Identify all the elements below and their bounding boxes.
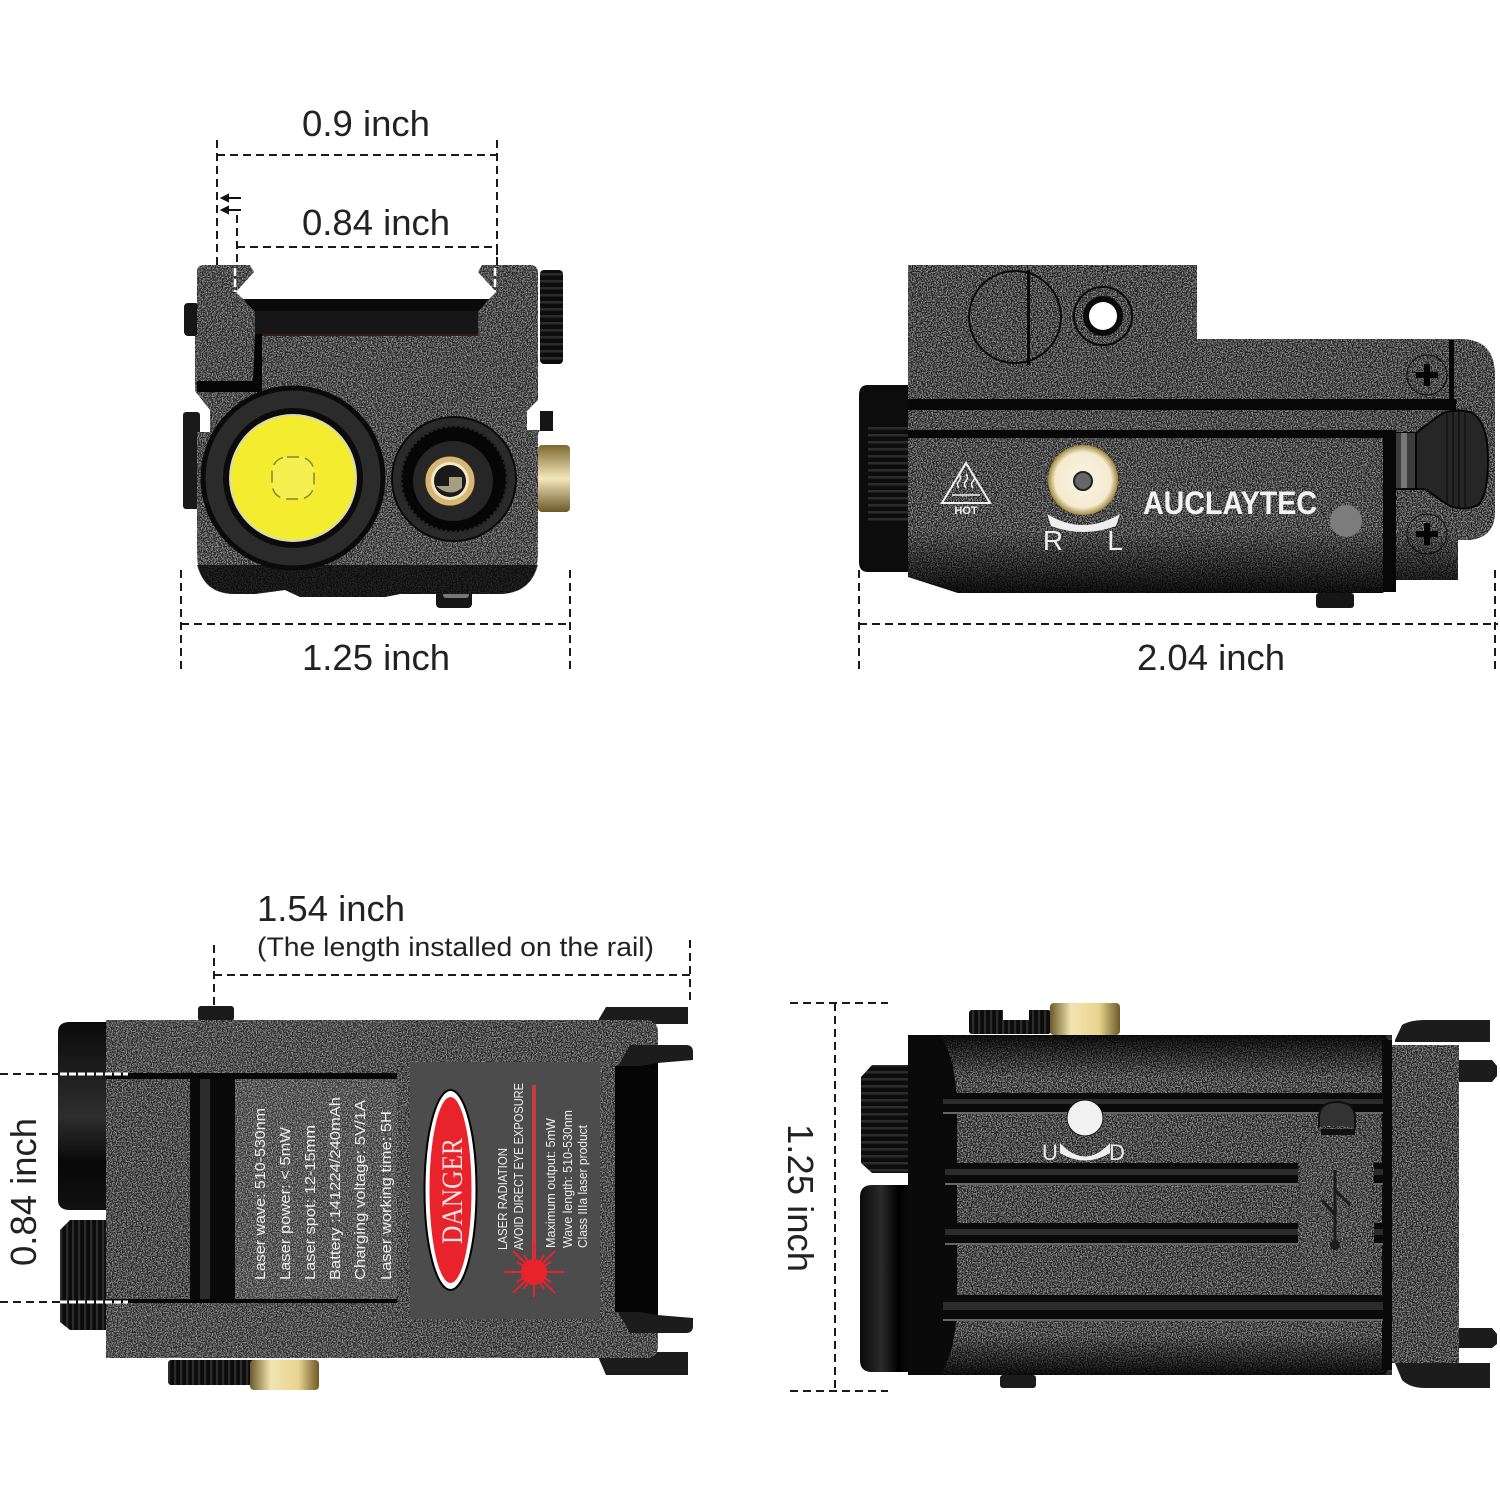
body xyxy=(195,265,540,597)
dimension: 1.54 inch: (The length installed on the rail) xyxy=(257,932,654,962)
lens and knob xyxy=(859,385,908,572)
grooves xyxy=(943,1093,1383,1321)
laser aperture xyxy=(392,417,516,541)
danger oval: DANGER xyxy=(436,1138,469,1244)
rail slot xyxy=(197,299,489,392)
dimension: 1.25 inch vertical xyxy=(780,1003,888,1391)
body xyxy=(908,265,1495,593)
body xyxy=(908,1035,1459,1375)
front band xyxy=(908,1035,957,1375)
windage screw: R xyxy=(1043,525,1063,556)
lens and knob xyxy=(58,1022,106,1330)
specification text: Laser wave: 510-530nm xyxy=(252,1108,269,1280)
side parts xyxy=(183,270,563,608)
dimension: 0.9 inch xyxy=(217,103,497,265)
laser warning text: Maximum output: 5mW xyxy=(543,1117,558,1248)
studs and brass knob xyxy=(168,1006,319,1390)
screws xyxy=(1407,355,1447,554)
tabs and prongs xyxy=(1395,1020,1497,1388)
laser beam and starburst xyxy=(504,1085,564,1297)
label plate xyxy=(410,1062,600,1319)
body xyxy=(106,1020,658,1358)
specification text: Laser spot: 12-15mm xyxy=(302,1125,319,1280)
flashlight lens xyxy=(203,388,383,568)
lever xyxy=(1396,411,1488,508)
laser warning text: Wave length: 510-530nm xyxy=(560,1110,575,1248)
rear divider xyxy=(1382,1040,1392,1370)
bottom stud xyxy=(1316,593,1354,608)
dimension: 2.04 inch: 2.04 inch xyxy=(1137,637,1285,678)
panel: top view with label xyxy=(0,888,693,1390)
windage screw xyxy=(1043,445,1123,556)
dimension: 1.54 inch: 1.54 inch xyxy=(257,888,405,929)
dimension: 1.25 inch vertical: 1.25 inch xyxy=(780,1124,821,1272)
laser warning text xyxy=(495,1083,590,1250)
laser warning text: AVOID DIRECT EYE EXPOSURE xyxy=(511,1083,526,1250)
grooves xyxy=(908,340,1456,592)
laser warning text: Class IIIa laser product xyxy=(575,1125,590,1248)
dimension: 1.25 inch: 1.25 inch xyxy=(302,637,450,678)
adjustment dial xyxy=(969,270,1132,365)
hot warning icon xyxy=(942,463,990,517)
brand logo: AUCLAYTEC xyxy=(1143,485,1317,521)
rod xyxy=(190,1079,235,1299)
panel: bottom view xyxy=(780,1003,1497,1391)
top knob and brass xyxy=(969,1003,1120,1388)
brass knob xyxy=(538,445,570,512)
inner slot and prongs xyxy=(615,1045,693,1333)
panel: side view xyxy=(859,265,1498,678)
lower shade xyxy=(908,530,1458,593)
lower edge shade xyxy=(197,565,538,597)
dimension: 1.25 inch xyxy=(181,570,570,678)
knob and lens xyxy=(860,1065,908,1372)
dimension: 1.54 inch xyxy=(214,888,690,1008)
specification text: Battery :141224/240mAh xyxy=(327,1097,344,1280)
USB cover xyxy=(1299,1102,1373,1285)
hot warning icon: HOT xyxy=(954,505,978,517)
dimension: 2.04 inch xyxy=(859,570,1498,678)
windage screw: L xyxy=(1107,525,1123,556)
elevation screw: D xyxy=(1109,1140,1125,1165)
panel: front view xyxy=(181,103,570,678)
dimension: 0.84 inch vertical xyxy=(0,1074,128,1302)
dimension: 0.84 inch vertical: 0.84 inch xyxy=(3,1118,44,1266)
gray dot xyxy=(1330,505,1362,537)
top and bottom shading xyxy=(908,1035,1392,1375)
specification text: Laser working time: 5H xyxy=(378,1111,395,1280)
danger oval xyxy=(424,1090,476,1290)
dimension: 0.84 inch xyxy=(237,202,497,265)
rail tabs xyxy=(596,1007,688,1375)
dimension: 0.9 inch: 0.9 inch xyxy=(302,103,430,144)
small arrows xyxy=(222,195,241,213)
dimension: 0.84 inch: 0.84 inch xyxy=(302,202,450,243)
specification text xyxy=(252,1097,395,1280)
rail strips xyxy=(106,1020,397,1358)
elevation screw xyxy=(1042,1100,1125,1165)
laser warning text: LASER RADIATION xyxy=(495,1148,510,1250)
elevation screw: U xyxy=(1042,1140,1058,1165)
claw measurement pills xyxy=(235,268,495,292)
specification text: Laser power: < 5mW xyxy=(277,1126,294,1280)
specification text: Charging voltage: 5V/1A xyxy=(352,1100,369,1280)
